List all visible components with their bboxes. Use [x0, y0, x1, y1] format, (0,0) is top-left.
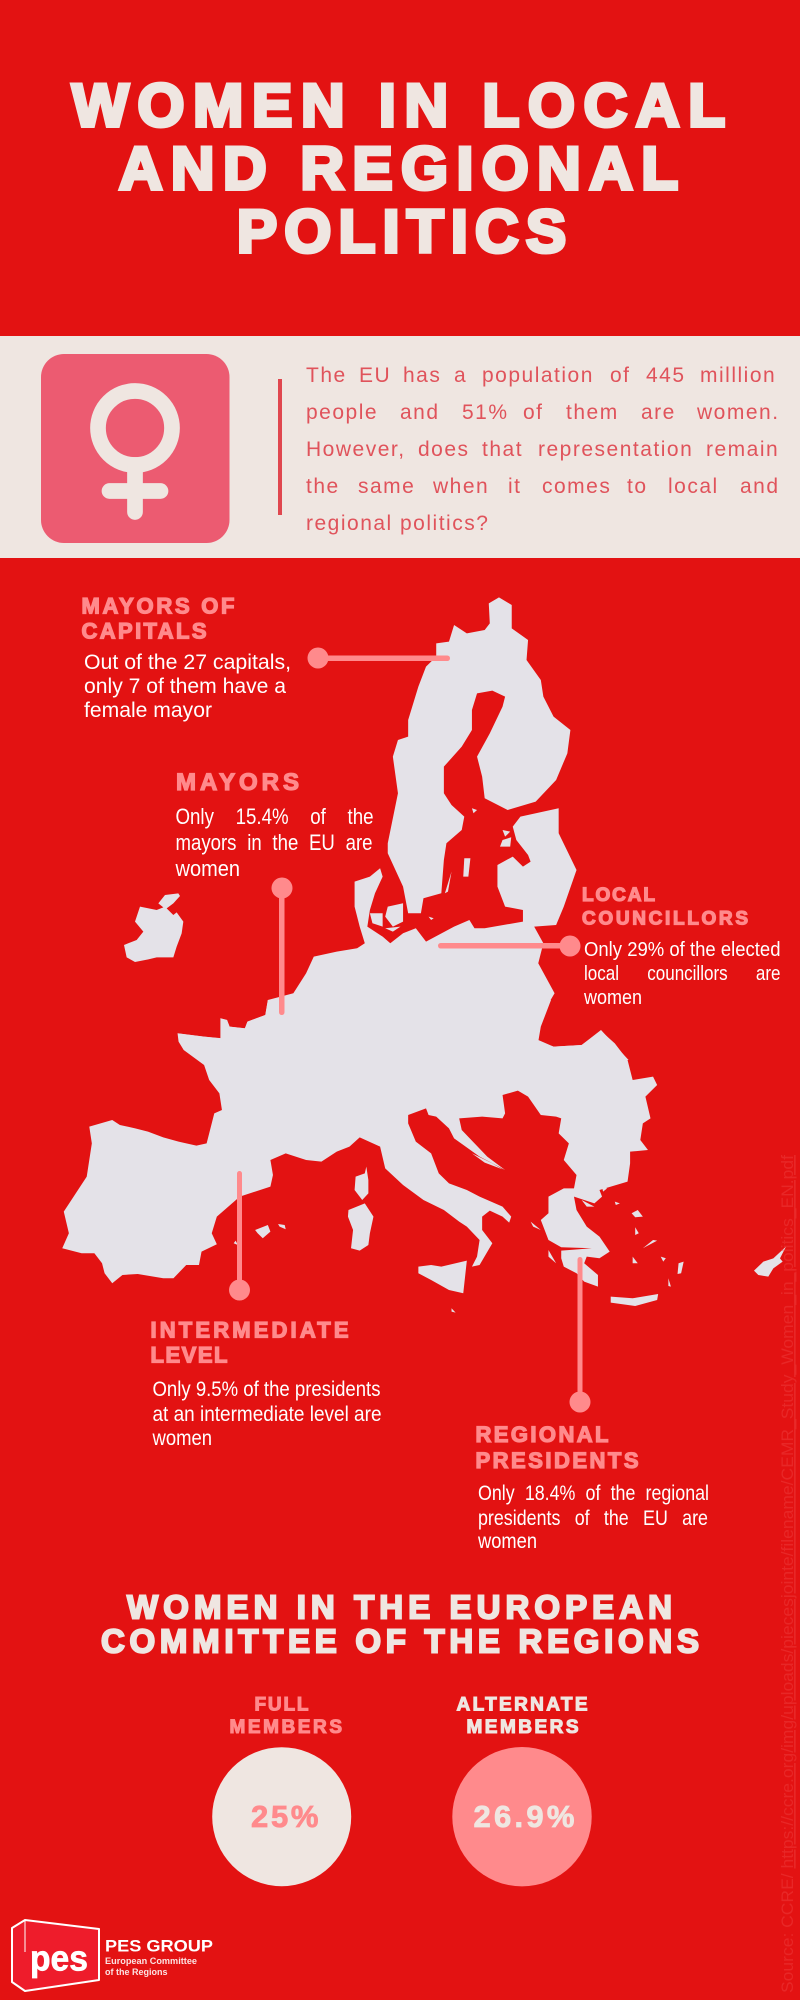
stat: alternate members: ALTERNATE — [456, 1694, 588, 1716]
callout: local councillors: LOCAL — [582, 885, 655, 906]
intro paragraph: comes — [542, 475, 611, 498]
callout: regional presidents: Only 18.4% of the regional — [478, 1482, 709, 1505]
logo wordmark: European Committee — [105, 1956, 197, 1966]
callout: intermediate level: at an intermediate level are — [152, 1403, 382, 1426]
mainland south: France, Iberia, Italy, Balkans, Greece — [62, 1000, 657, 1287]
intro paragraph: women. — [696, 401, 780, 424]
intro paragraph: remain — [706, 438, 779, 461]
logo wordmark: PES GROUP — [105, 1936, 213, 1956]
callout: mayors of capitals: Out of the 27 capitals, — [84, 651, 291, 674]
callout: mayors: MAYORS — [176, 769, 299, 796]
callout: mayors of capitals: MAYORS OF — [82, 594, 234, 618]
callout: mayors of capitals: female mayor — [84, 699, 212, 722]
icon: female symbol — [41, 354, 230, 543]
stat: full members — [212, 1694, 351, 1886]
callout: local councillors: Only 29% of the elected — [584, 939, 780, 961]
callout line: regional presidents — [570, 1257, 590, 1412]
logo mark: pes — [30, 1938, 88, 1978]
logo: PES Group — [12, 1920, 213, 1991]
logo wordmark: of the Regions — [105, 1967, 168, 1977]
intro paragraph: of — [610, 364, 631, 387]
heading: women in the committee: COMMITTEE OF THE REGIONS — [101, 1622, 699, 1660]
callout: regional presidents: women — [477, 1530, 537, 1553]
title: AND REGIONAL — [119, 135, 678, 202]
callout: regional presidents: PRESIDENTS — [476, 1448, 638, 1473]
stat: full members: 25% — [251, 1799, 318, 1834]
callout: mayors: mayors in the EU are — [176, 830, 372, 855]
stat: alternate members — [452, 1694, 592, 1886]
intro paragraph: regional — [306, 512, 393, 535]
intro paragraph: it — [508, 475, 522, 498]
callout: mayors of capitals — [82, 594, 291, 722]
callout: mayors: Only 15.4% of the — [176, 804, 374, 829]
callout: regional presidents: REGIONAL — [476, 1422, 608, 1447]
intro paragraph: does — [418, 438, 470, 461]
intro paragraph: local — [668, 475, 719, 498]
intro paragraph: EU — [359, 364, 391, 387]
intro paragraph: politics? — [400, 512, 489, 535]
callout line: intermediate level — [229, 1171, 250, 1300]
panel: introduction band — [0, 336, 800, 558]
intro paragraph: to — [627, 475, 648, 498]
intro paragraph: 51% — [462, 401, 509, 424]
callout: intermediate level — [150, 1318, 382, 1450]
Cyprus — [754, 1247, 786, 1277]
callout: regional presidents — [476, 1422, 709, 1553]
map of the European Union — [62, 597, 786, 1313]
intro paragraph: are — [641, 401, 676, 424]
Sweden and Finland — [388, 597, 570, 913]
callout: intermediate level: INTERMEDIATE — [150, 1318, 348, 1342]
intro paragraph: them — [566, 401, 619, 424]
callout: mayors of capitals: CAPITALS — [82, 618, 206, 644]
callout line: local councillors — [438, 936, 580, 956]
heading: women in the committee — [101, 1588, 699, 1660]
intro paragraph: the — [306, 475, 340, 498]
callout: local councillors: women — [583, 987, 642, 1009]
title: POLITICS — [237, 198, 566, 265]
callout: intermediate level: Only 9.5% of the presidents — [152, 1378, 380, 1401]
callout: intermediate level: women — [152, 1427, 212, 1450]
callout: regional presidents: presidents of the EU are — [478, 1507, 708, 1530]
intro paragraph: However, — [306, 438, 406, 461]
intro paragraph: population — [482, 364, 594, 387]
Ireland — [124, 893, 183, 962]
callout: mayors — [175, 769, 374, 881]
callout line: mayors — [272, 878, 292, 1015]
intro paragraph — [306, 364, 780, 535]
title: WOMEN IN LOCAL — [72, 72, 725, 139]
intro paragraph: and — [740, 475, 780, 498]
stat: full members: MEMBERS — [230, 1717, 342, 1738]
divider bar — [278, 379, 282, 515]
stat: full members: FULL — [254, 1694, 309, 1716]
intro paragraph: milllion — [700, 364, 776, 387]
callout: mayors of capitals: only 7 of them have a — [84, 675, 286, 698]
intro paragraph: of — [523, 401, 544, 424]
source note: Source: CCRE/ https://ccre.org/img/uploads/piecesjointe/filename/CEMR_Study_Women_in_politics_EN.pdf — [778, 1155, 797, 1993]
stat: alternate members: 26.9% — [474, 1799, 574, 1834]
logo wordmark — [105, 1936, 213, 1977]
heading: women in the committee: WOMEN IN THE EUROPEAN — [127, 1588, 672, 1626]
stat: alternate members: MEMBERS — [466, 1717, 578, 1738]
callout: intermediate level: LEVEL — [150, 1342, 228, 1368]
intro paragraph: people — [306, 401, 378, 424]
mainland north: Benelux, Germany, Denmark, Baltics — [178, 808, 629, 1060]
logo mark — [12, 1920, 99, 1991]
callout line: mayors of capitals — [308, 648, 450, 668]
intro paragraph: representation — [538, 438, 693, 461]
intro paragraph: 445 — [646, 364, 686, 387]
intro paragraph: same — [358, 475, 415, 498]
islands: Corsica, Sardinia, Sicily, Balearics, Crete, Aegean — [234, 1153, 684, 1313]
intro paragraph: has — [403, 364, 441, 387]
islands: Baltic and Danish — [370, 808, 511, 932]
callout: local councillors — [582, 885, 780, 1009]
intro paragraph: a — [454, 364, 467, 387]
title — [72, 72, 725, 265]
callout: mayors: women — [175, 856, 240, 881]
intro paragraph: when — [432, 475, 489, 498]
intro paragraph: The — [306, 364, 347, 387]
intro paragraph: and — [400, 401, 440, 424]
callout: local councillors: COUNCILLORS — [582, 908, 748, 930]
intro paragraph: that — [482, 438, 523, 461]
